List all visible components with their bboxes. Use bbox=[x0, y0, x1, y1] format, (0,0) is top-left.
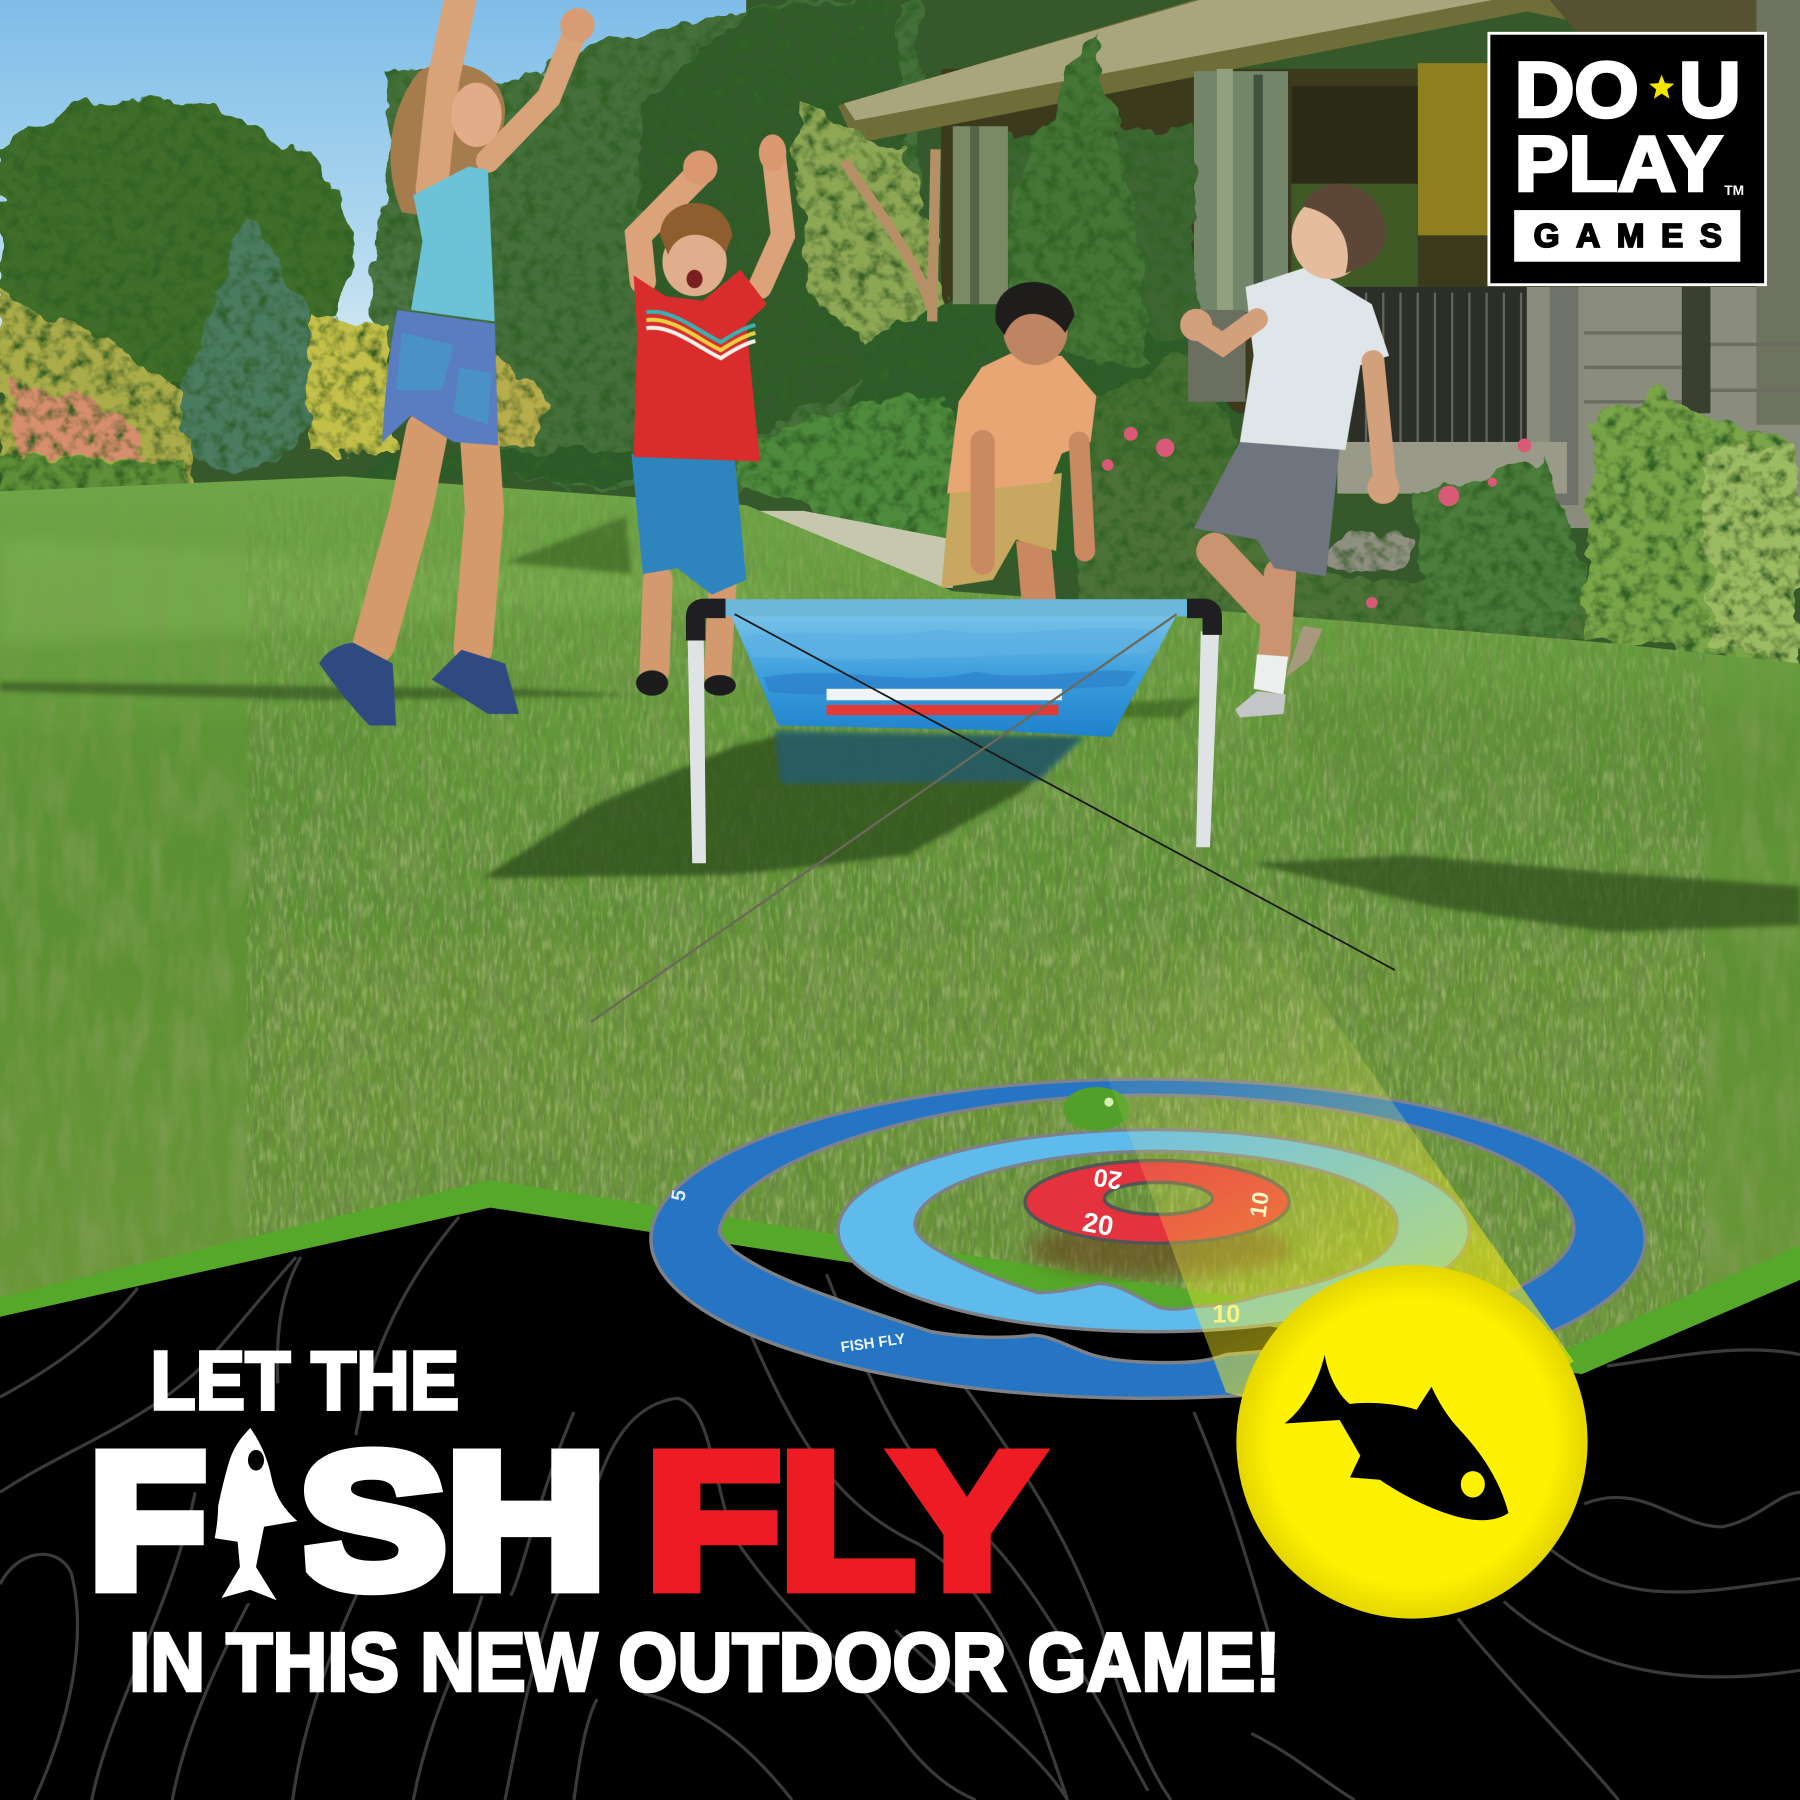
girl shoes bbox=[319, 643, 519, 726]
stepping stone path bbox=[744, 511, 953, 588]
headline word: fish bbox=[90, 1414, 606, 1627]
fish gap behind the letter bbox=[204, 1423, 308, 1605]
white shirt boy shorts bbox=[1194, 442, 1340, 576]
house roof and structure bbox=[838, 0, 1800, 413]
target rings on the lawn bbox=[651, 1079, 1645, 1398]
sky bbox=[0, 0, 746, 344]
middle ring number 10: 10 bbox=[1212, 1300, 1240, 1328]
boy legs bbox=[654, 574, 723, 672]
black band bbox=[0, 1208, 1800, 1800]
girl torso and tank top bbox=[411, 166, 495, 321]
logo box bbox=[1489, 33, 1766, 285]
headline line: let the: LET THE bbox=[150, 1334, 459, 1427]
orange boy shorts bbox=[941, 473, 1062, 588]
headline word: fly: FLY bbox=[646, 1414, 1040, 1627]
lawn bbox=[0, 476, 1800, 1378]
orange boy head bbox=[1003, 296, 1068, 365]
banner bbox=[729, 611, 1179, 737]
center ring number 20: 20 bbox=[1080, 1206, 1116, 1242]
gray string bbox=[591, 614, 1177, 1022]
plants and flowers in the flower bed bbox=[1079, 390, 1800, 664]
bare tree trunk bbox=[844, 149, 936, 321]
boy shirt stripes bbox=[646, 312, 755, 358]
outer blue ring bbox=[651, 1079, 1645, 1398]
center ring number 20 upside down: 20 bbox=[1092, 1163, 1124, 1194]
white shirt boy legs bbox=[1215, 551, 1280, 654]
black string bbox=[735, 614, 1395, 970]
kid: boy in orange shirt crouching bbox=[941, 282, 1096, 603]
right pole bbox=[1196, 631, 1219, 847]
yellow circle bbox=[1236, 1265, 1588, 1619]
headline word: fish: I bbox=[245, 1414, 258, 1627]
girl legs bbox=[374, 430, 484, 649]
headline word: fish: SH bbox=[298, 1414, 606, 1627]
net target frame with fish banner bbox=[591, 599, 1395, 1022]
middle light blue ring bbox=[838, 1130, 1469, 1332]
girl shorts pattern bbox=[396, 333, 491, 425]
left pole bbox=[688, 637, 706, 863]
girl fist bbox=[560, 8, 595, 42]
fish-shaped letter I bbox=[204, 1423, 308, 1605]
garden trees and shrubs bbox=[0, 0, 918, 503]
white shirt boy arms bbox=[1196, 319, 1384, 476]
orange boy shirt bbox=[947, 354, 1096, 494]
top bar bbox=[721, 599, 1189, 616]
outer ring number 5: 5 bbox=[667, 1188, 691, 1203]
logo text: games: GAMES bbox=[1534, 218, 1722, 255]
logo text: play: PLAY bbox=[1515, 120, 1723, 208]
logo star bbox=[1649, 75, 1674, 99]
girl face bbox=[451, 83, 502, 147]
green stripe bbox=[0, 1180, 1800, 1800]
boy red shirt bbox=[634, 270, 767, 461]
headline line: in this new outdoor game: IN THIS NEW OUTDOOR GAME! bbox=[129, 1615, 1281, 1708]
stone house wall bbox=[1188, 0, 1800, 528]
center red ring bbox=[1025, 1161, 1289, 1243]
center ring number 10: 10 bbox=[1245, 1190, 1274, 1219]
fish eye hole bbox=[248, 1450, 264, 1471]
boy arms bbox=[638, 155, 783, 287]
orange boy legs bbox=[1033, 540, 1039, 603]
outer ring game logo: FISH FLY bbox=[840, 1330, 906, 1356]
base foliage colour bbox=[0, 0, 1800, 689]
green ball bbox=[1063, 1087, 1130, 1131]
left elbow bbox=[696, 608, 726, 641]
banner waves bbox=[746, 628, 1159, 695]
fish body bbox=[215, 1428, 297, 1600]
orange boy hair bbox=[995, 282, 1074, 335]
kid: girl in blue tank top jumping bbox=[319, 0, 595, 726]
lawn highlights bbox=[247, 494, 1705, 1378]
kid: boy in white shirt hopping bbox=[1180, 184, 1399, 717]
lawn texture bbox=[0, 482, 1800, 1378]
headline bbox=[90, 1334, 1281, 1708]
shadows on the lawn bbox=[0, 517, 1800, 932]
sharp lawn texture bbox=[247, 494, 1705, 1378]
white shirt boy shirt bbox=[1240, 266, 1389, 450]
white shirt boy fists bbox=[1180, 309, 1399, 504]
orange boy arms bbox=[983, 442, 1085, 562]
girl hair bbox=[390, 64, 505, 218]
logo trademark: TM bbox=[1724, 183, 1744, 198]
brand logo: Do U Play Games bbox=[1489, 33, 1766, 285]
boy mouth bbox=[686, 270, 703, 288]
photo background: garden and house bbox=[0, 0, 1800, 689]
house column bbox=[953, 126, 1008, 304]
kid: boy in red shirt cheering bbox=[631, 134, 786, 696]
fish eye bbox=[1461, 1471, 1485, 1498]
boy shorts bbox=[631, 453, 746, 595]
railing bbox=[1349, 287, 1544, 442]
boy shoes bbox=[636, 670, 736, 696]
blurred lawn mottling bbox=[0, 633, 1800, 1348]
logo text: u: U bbox=[1679, 46, 1741, 134]
yellow ball with fish icon bbox=[1236, 1265, 1588, 1619]
trees in front of the house bbox=[735, 34, 1251, 608]
logo text: do: DO bbox=[1515, 46, 1639, 134]
boy hair bbox=[660, 203, 732, 255]
girl arms bbox=[432, 0, 574, 189]
fish silhouette bbox=[1285, 1355, 1508, 1520]
white shirt boy socks and shoes bbox=[1235, 626, 1322, 717]
white shirt boy head bbox=[1291, 196, 1367, 279]
girl shorts bbox=[382, 310, 498, 445]
logo games bar bbox=[1514, 210, 1740, 262]
headline word: fish: F bbox=[90, 1414, 206, 1627]
yellow spotlight beam bbox=[1056, 941, 1574, 1442]
lawn mown stripes bbox=[0, 540, 1800, 1148]
right elbow bbox=[1187, 608, 1212, 635]
black lower band with green stripe bbox=[0, 1180, 1800, 1800]
topographic contour lines bbox=[0, 1217, 1800, 1800]
ring shadows on grass bbox=[1027, 1221, 1291, 1277]
pink flowers bbox=[1102, 427, 1531, 608]
boy fists bbox=[683, 134, 786, 185]
banner logo bbox=[827, 689, 1062, 715]
white shirt boy hair bbox=[1303, 184, 1386, 273]
boy head bbox=[662, 227, 727, 296]
